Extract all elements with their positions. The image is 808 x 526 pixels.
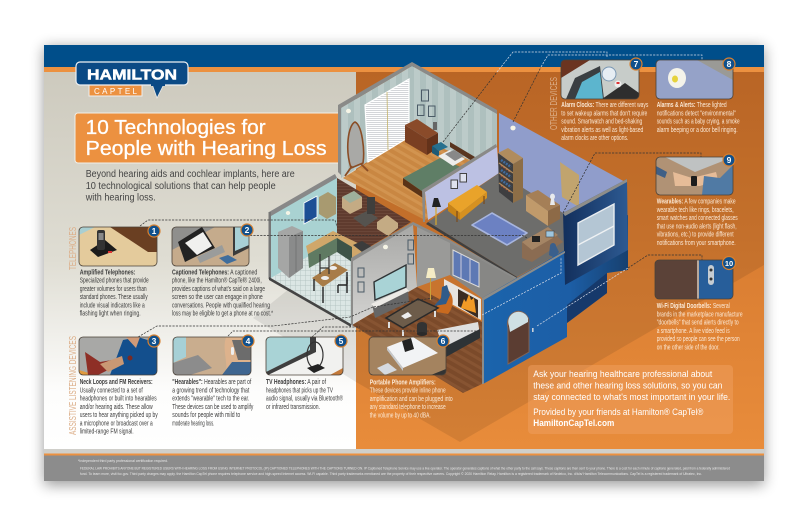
text: TV headphones xyxy=(266,377,343,411)
text: wi-fi doorbells: a smartphone. A live video feed is xyxy=(657,326,730,335)
purple room xyxy=(422,113,627,280)
title banner xyxy=(75,113,340,163)
text: captioned telephones xyxy=(172,267,273,318)
text: wi-fi doorbells xyxy=(657,301,743,351)
panel 8: alarms and alerts xyxy=(656,58,740,134)
text: alarm clocks: vibration alerts as well as light-based xyxy=(561,125,643,134)
text: TV headphones: TV Headphones: A pair of xyxy=(266,377,327,386)
thumbnail: doorbell beside door xyxy=(655,260,733,299)
text: alarms and alerts: alarm beeping or a door bell ringing. xyxy=(657,125,738,134)
title banner: People with Hearing Loss xyxy=(86,138,327,160)
text: captioned telephones: Captioned Telephones: A captioned xyxy=(172,267,257,276)
text: wearables: wearable tech like rings, bracelets, xyxy=(656,205,734,214)
text: hearables: moderate hearing loss. xyxy=(172,418,214,427)
intro text: with hearing loss. xyxy=(85,193,156,204)
text: hearables xyxy=(172,377,253,427)
text: amplified telephones: greater volumes for users than xyxy=(80,284,147,293)
text: wearables xyxy=(656,197,738,247)
text: TV headphones: or infrared transmission. xyxy=(266,402,320,411)
poster background xyxy=(44,45,764,481)
badge 9: 9 xyxy=(727,155,732,165)
text: wearables: notifications from your smartphone. xyxy=(657,238,736,247)
kitchen room xyxy=(268,174,411,327)
text: portable phone amplifiers: These devices provide inline phone xyxy=(370,386,446,395)
text: wi-fi doorbells: "doorbells" that send alerts directly to xyxy=(657,318,739,326)
closing callout: stay connected to what's most important in your life. xyxy=(533,392,730,403)
panel 4: hearables xyxy=(172,335,254,427)
text: wearables: Wearables: A few companies make xyxy=(657,197,736,206)
text: captioned telephones: screen so the user can engage in phone xyxy=(172,292,263,301)
text: portable phone amplifiers xyxy=(370,377,453,419)
footer: FEDERAL LAW PROHIBITS ANYONE BUT REGISTERED USERS WITH HEARING LOSS FROM USING INTERNET PROTOCOL (IP) CAPTIONED TELEPHONES WITH THE CAPTIONS TURNED ON. IP Captioned Telephone Service may use a live operator. The operator generates captions of what the other party to the call says. These captions are then sent to your phone. There is a cost for each minute of captions generated, paid from a federally administered xyxy=(80,466,730,470)
text: amplified telephones: standard phones. These usually xyxy=(80,292,148,301)
text: neck loops xyxy=(80,377,158,436)
text: portable phone amplifiers: the volume by up to 40 dBA. xyxy=(370,410,431,419)
text: neck loops: a microphone or broadcast over a xyxy=(80,418,153,427)
text: wi-fi doorbells: provided so people can see the person xyxy=(657,334,740,343)
section label: telephones: TELEPHONES xyxy=(68,227,79,270)
thumbnail: headphones xyxy=(266,337,343,375)
bedroom room xyxy=(338,62,497,220)
text: amplified telephones: Amplified Telephones: xyxy=(80,267,135,276)
text: neck loops: limited-range FM signal. xyxy=(80,426,134,436)
text: hearables: extends "wearable" tech to the ear. xyxy=(172,394,249,402)
text: portable phone amplifiers: Portable Phone Amplifiers: xyxy=(370,377,436,386)
closing callout: these and other hearing loss solutions, so you can xyxy=(533,381,722,392)
card drop shadow xyxy=(44,47,764,485)
exterior blue walls xyxy=(482,179,628,384)
text: neck loops: and/or hearing aids. These allow xyxy=(80,402,153,411)
text: wi-fi doorbells: brands in the marketplace manufacture xyxy=(657,309,743,318)
text: alarms and alerts: notifications detect "environmental" xyxy=(657,108,736,117)
panel 5: TV headphones xyxy=(266,335,347,411)
badge 4: 4 xyxy=(246,336,251,346)
text: neck loops: headphones or built into hearables xyxy=(80,394,157,402)
logo: Hamilton CapTel xyxy=(76,62,188,98)
text: wearables: vibrations, etc.) to provide different xyxy=(657,230,734,239)
panel 6: portable phone amplifiers xyxy=(369,335,453,419)
badge 6: 6 xyxy=(441,336,446,346)
section label: other devices: OTHER DEVICES xyxy=(549,77,560,130)
text: amplified telephones: Specialized phones that provide xyxy=(80,276,149,285)
closing callout xyxy=(528,365,733,434)
panel 10: wi-fi doorbells xyxy=(655,256,743,351)
text: wi-fi doorbells: on the other side of the door. xyxy=(657,342,720,351)
text: amplified telephones xyxy=(80,267,149,318)
thumbnail: bedside alarm clock xyxy=(561,60,639,99)
text: hearables: These devices can be used to amplify xyxy=(172,402,253,411)
text: amplified telephones: flashing light when ringing. xyxy=(80,308,141,318)
thumbnail: ear with hearable xyxy=(173,337,251,375)
text: neck loops: Neck Loops and FM Receivers: xyxy=(80,377,153,386)
text: captioned telephones: conversations. People with qualified hearing xyxy=(172,300,270,309)
thumbnail: phone on desk xyxy=(79,227,157,266)
closing callout: Ask your hearing healthcare professional about xyxy=(533,369,713,380)
footer: *Independent third party professional certification required. xyxy=(78,459,168,463)
intro text: Beyond hearing aids and cochlear implants, here are xyxy=(86,169,295,180)
panel 7: alarm clocks xyxy=(561,58,648,142)
closing callout: Provided by your friends at Hamilton® CapTel® xyxy=(533,407,703,418)
panel 9: wearables xyxy=(656,154,738,247)
badge 3: 3 xyxy=(152,336,157,346)
text: alarms and alerts xyxy=(657,100,740,134)
badge 5: 5 xyxy=(339,336,344,346)
text: hearables: "Hearables": Hearables are part of xyxy=(172,377,252,386)
text: alarms and alerts: sounds such as a baby crying, a smoke xyxy=(657,116,740,126)
illustration: isometric house cutaway xyxy=(268,62,628,393)
footer xyxy=(44,454,764,481)
leader lines xyxy=(138,52,702,337)
panel 1: amplified telephones xyxy=(79,225,160,318)
text: hearables: a growing trend of technology that xyxy=(172,385,250,394)
text: alarm clocks: to set wakeup alarms that don't require xyxy=(561,108,647,117)
title banner: 10 Technologies for xyxy=(86,117,266,139)
logo: Hamilton CapTel: CAPTEL xyxy=(94,87,138,96)
badge 7: 7 xyxy=(634,59,639,69)
intro text xyxy=(85,169,295,204)
text: wearables: that use non-audio alerts (light flash, xyxy=(657,222,737,230)
text: captioned telephones: provides captions of what's said on a large xyxy=(172,284,265,293)
text: wearables: smart watches and connected glasses xyxy=(657,213,738,222)
footer: fund. To learn more, visit fcc.gov. Third party charges may apply. the Hamilton CapTel phone requires telephone service and high-speed Internet access. Wi-Fi capable. Third party trademarks mentioned are the property of their respective owners. Copyright © 2020 Hamilton Relay. Hamilton is a registered trademark of Nedelco, Inc. d/b/a/ Hamilton Telecommunications. CapTel is a registered trademark of Ultratec, Inc. xyxy=(80,472,702,476)
badge 10: 10 xyxy=(725,259,733,268)
section label: assistive listening devices: ASSISTIVE LISTENING DEVICES xyxy=(68,336,79,435)
badge 2: 2 xyxy=(245,225,250,235)
text: captioned telephones: phone, like the Hamilton® CapTel® 2400i, xyxy=(172,276,262,285)
text: TV headphones: audio signal, usually via Bluetooth® xyxy=(266,394,343,402)
text: alarm clocks: sound. Smartwatch and bed-shaking xyxy=(561,116,642,126)
text: portable phone amplifiers: any standard telephone to increase xyxy=(370,402,446,411)
text: wi-fi doorbells: Wi-Fi Digital Doorbells: Several xyxy=(657,301,730,310)
thumbnail: woman with neck loop xyxy=(79,337,157,375)
text: alarm clocks xyxy=(561,100,648,142)
text: TV headphones: headphones that picks up the TV xyxy=(266,385,334,394)
thumbnail: captioned phone xyxy=(172,227,249,266)
intro text: 10 technological solutions that can help people xyxy=(86,181,276,192)
living room xyxy=(351,222,517,393)
text: alarm clocks: alarm clocks are other options. xyxy=(561,133,628,142)
panel 3: neck loops xyxy=(79,335,160,436)
text: captioned telephones: loss may be eligible to get a phone at no cost.* xyxy=(172,308,273,318)
text: amplified telephones: include visual indicators like a xyxy=(80,300,145,309)
badge 1: 1 xyxy=(152,226,157,236)
text: alarm clocks: Alarm Clocks: There are different ways xyxy=(561,100,648,109)
logo: Hamilton CapTel: HAMILTON xyxy=(87,66,177,84)
text: neck loops: Usually connected to a set of xyxy=(80,385,143,394)
thumbnail: amplifier phone xyxy=(369,337,446,375)
badge 8: 8 xyxy=(727,59,732,69)
text: hearables: sounds for people with mild to xyxy=(172,410,240,419)
panel 2: captioned telephones xyxy=(172,224,273,318)
thumbnail: smartwatch on wrist xyxy=(656,157,733,195)
closing callout: HamiltonCapTel.com xyxy=(533,418,614,429)
thumbnail: smoke alarm xyxy=(656,60,733,99)
text: neck loops: users to hear anything picked up by xyxy=(80,410,158,419)
text: alarms and alerts: Alarms & Alerts: These lighted xyxy=(657,100,727,109)
text: portable phone amplifiers: amplification and can be plugged into xyxy=(370,394,453,403)
